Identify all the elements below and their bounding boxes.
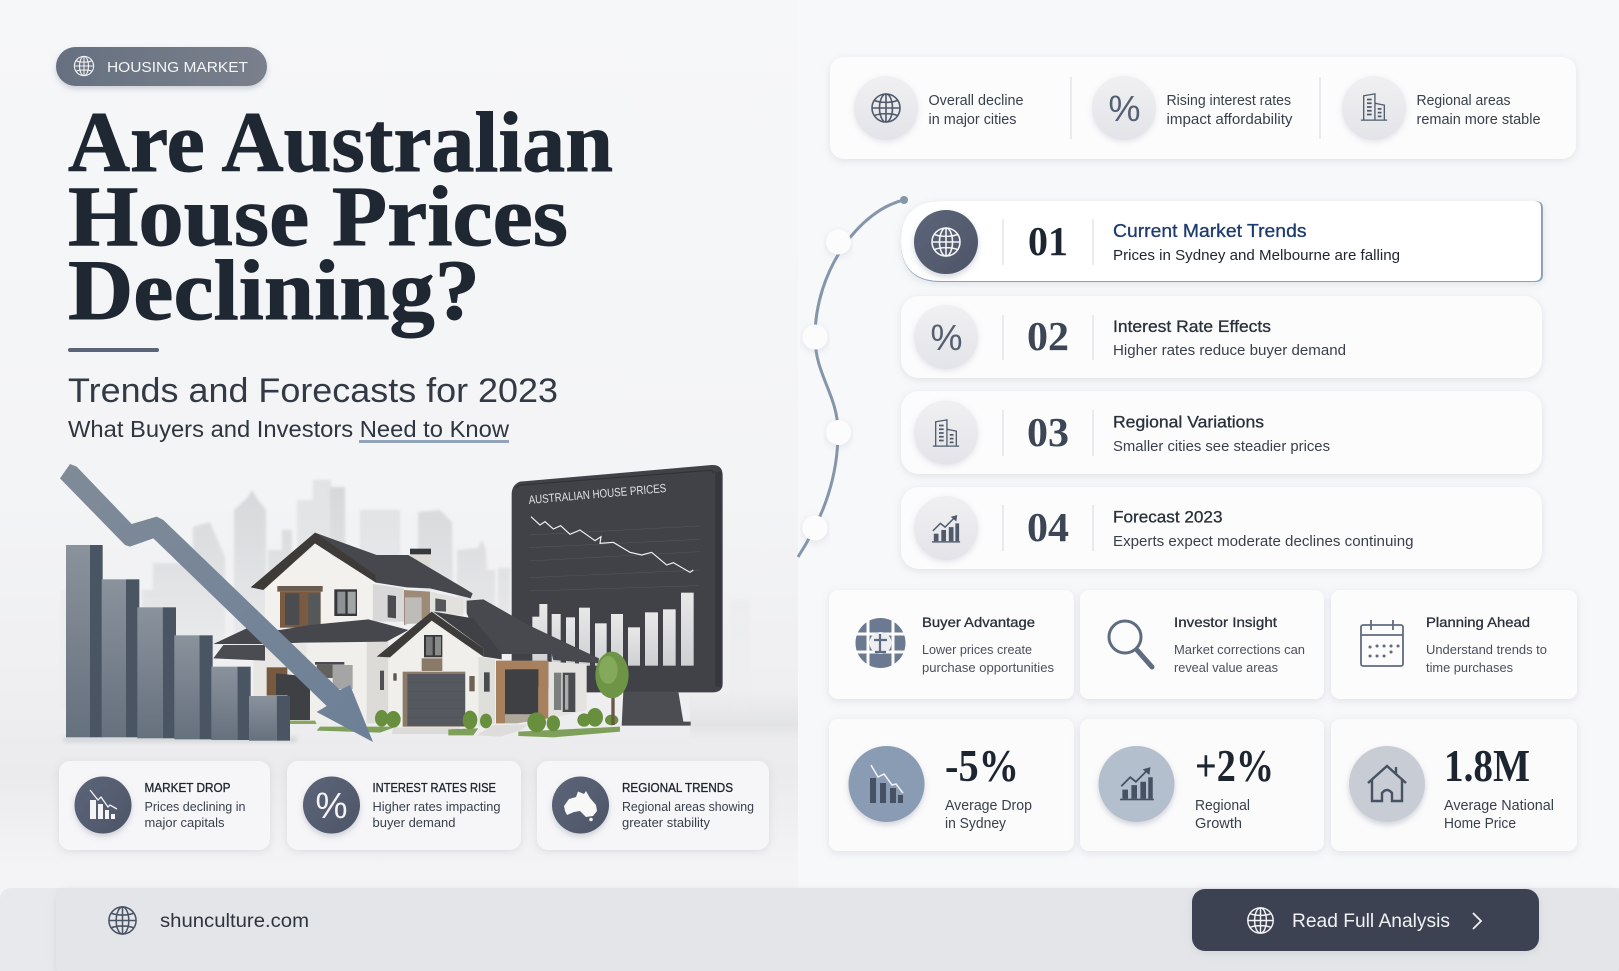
- list item 01: Prices in Sydney and Melbourne are falling: [1113, 247, 1400, 264]
- subtitle: Trends and Forecasts for 2023: [68, 372, 558, 410]
- card: interest rates rise: [287, 761, 521, 850]
- mid roof: [213, 619, 408, 644]
- card: regional trends: REGIONAL TRENDS: [622, 781, 733, 795]
- card: buyer advantage: [829, 590, 1074, 699]
- card: planning ahead: [1331, 590, 1577, 699]
- wall lamps: [393, 673, 397, 681]
- icon: buyer globe: [856, 618, 906, 668]
- stat: regional growth: [1080, 719, 1324, 851]
- card: interest rates rise: Higher rates impacting: [372, 799, 500, 814]
- icon: market drop: [74, 776, 132, 834]
- stat: average drop: in Sydney: [945, 816, 1007, 832]
- board heading: AUSTRALIAN HOUSE PRICES: [528, 481, 667, 507]
- card: buyer advantage: Lower prices create: [922, 643, 1032, 657]
- card: planning ahead: time purchases: [1426, 661, 1513, 675]
- contact shadow: [63, 737, 297, 742]
- list item 01: Current Market Trends: [1113, 221, 1306, 241]
- stat: regional growth: Growth: [1195, 816, 1242, 832]
- list item 04: 04: [1027, 504, 1069, 550]
- card: investor insight: reveal value areas: [1174, 661, 1278, 675]
- footer bar: [0, 888, 1619, 971]
- icon: pill globe: [74, 56, 94, 76]
- summary strip: [830, 57, 1576, 159]
- entry: [496, 661, 548, 723]
- card: interest rates rise: buyer demand: [372, 815, 456, 830]
- ground floor: [307, 643, 367, 722]
- card: investor insight: [1080, 590, 1324, 699]
- paths and lawn: [290, 721, 317, 724]
- upper wall: [265, 545, 373, 623]
- list item 02: Higher rates reduce buyer demand: [1113, 342, 1346, 359]
- stat: regional growth: Regional: [1195, 798, 1250, 814]
- list item 03: Regional Variations: [1113, 412, 1264, 432]
- card: buyer advantage: purchase opportunities: [922, 661, 1054, 675]
- item: overall decline: in major cities: [928, 112, 1016, 128]
- tree: [595, 652, 629, 725]
- board bars: [532, 593, 694, 666]
- icon: percent: [303, 776, 360, 834]
- timeline curve: [798, 196, 908, 557]
- card: planning ahead: Planning Ahead: [1426, 614, 1530, 630]
- front roofs: [467, 599, 599, 663]
- title: Declining?: [68, 242, 480, 338]
- side window: [554, 673, 561, 710]
- button: read full analysis: [1192, 889, 1539, 951]
- item: interest rates: impact affordability: [1166, 112, 1293, 128]
- stat: home price: Home Price: [1444, 816, 1516, 832]
- shrubs: [375, 708, 618, 732]
- card: investor insight: Market corrections can: [1174, 643, 1305, 657]
- item: overall decline: [854, 76, 1024, 140]
- stat: average drop: -5%: [945, 740, 1019, 791]
- title: Are Australian: [68, 94, 613, 190]
- card: planning ahead: Understand trends to: [1426, 643, 1547, 657]
- upper roof: [315, 533, 473, 598]
- icon: drop chart: [848, 746, 924, 822]
- card: market drop: Prices declining in: [144, 799, 246, 814]
- falling bars: [66, 545, 290, 741]
- title: [68, 94, 613, 338]
- list item 04: [901, 487, 1542, 569]
- item: interest rates: Rising interest rates: [1166, 93, 1291, 109]
- illustration: house, falling bars and arrow: [60, 464, 798, 742]
- skyline: [60, 480, 750, 710]
- item: regional stable: Regional areas: [1416, 93, 1510, 109]
- list item 01: 01: [1028, 218, 1068, 264]
- stat: average drop: Average Drop: [945, 798, 1032, 814]
- board stand: [622, 692, 691, 726]
- tagline with underline: What Buyers and Investors Need to Know: [68, 416, 509, 442]
- upper windows: [277, 586, 323, 592]
- card: market drop: major capitals: [144, 815, 225, 830]
- stat: home price: Average National: [1444, 798, 1554, 814]
- card: buyer advantage: Buyer Advantage: [922, 614, 1035, 630]
- haze behind board: [690, 690, 798, 740]
- item: interest rates: [1092, 76, 1293, 140]
- button: read full analysis: Read Full Analysis: [1292, 911, 1450, 932]
- icon: percent: %: [315, 785, 348, 826]
- tag pill: housing market: HOUSING MARKET: [107, 59, 248, 76]
- rear wing: [373, 584, 404, 622]
- list item 02: 02: [1027, 313, 1069, 359]
- list item 03: [901, 391, 1542, 474]
- card: regional trends: Regional areas showing: [622, 799, 754, 814]
- front gable wall: [478, 657, 495, 727]
- card: interest rates rise: INTEREST RATES RISE: [372, 781, 496, 795]
- stat: average drop: [829, 719, 1074, 851]
- item: interest rates: %: [1108, 88, 1141, 129]
- left panel background: [0, 0, 798, 900]
- chimney: [411, 553, 431, 577]
- falling arrow: [60, 464, 373, 742]
- card: market drop: [59, 761, 270, 850]
- list item 03: Smaller cities see steadier prices: [1113, 438, 1330, 455]
- list item 02: Interest Rate Effects: [1113, 317, 1271, 336]
- dividers: [1071, 77, 1320, 139]
- right section wall: [548, 662, 587, 719]
- item: regional stable: remain more stable: [1416, 112, 1540, 128]
- item: regional stable: [1342, 76, 1540, 140]
- card: regional trends: [537, 761, 769, 850]
- stat: home price: 1.8M: [1444, 740, 1530, 791]
- icon: footer globe: [109, 907, 136, 934]
- website: shunculture.com: [160, 911, 309, 932]
- house: [213, 533, 629, 737]
- list item 02: %: [930, 317, 963, 358]
- tag pill: housing market: [56, 47, 267, 86]
- stat: regional growth: +2%: [1195, 740, 1274, 791]
- list item 04: Experts expect moderate declines continuing: [1113, 533, 1414, 550]
- garage door: [403, 672, 465, 727]
- list item 03: 03: [1027, 409, 1069, 455]
- list item 04: Forecast 2023: [1113, 508, 1222, 526]
- card: investor insight: Investor Insight: [1174, 614, 1277, 630]
- stat: home price: [1331, 719, 1577, 851]
- falling bars and arrow: [60, 464, 373, 742]
- icon: australia map: [552, 776, 609, 834]
- card: market drop: MARKET DROP: [144, 781, 230, 795]
- icon: calendar: [1361, 620, 1403, 666]
- gable window and panel: [424, 635, 442, 657]
- card: regional trends: greater stability: [622, 815, 710, 830]
- list item 01: [901, 201, 1543, 282]
- icon: growth chart: [1098, 746, 1174, 822]
- icon: magnifier: [1109, 621, 1152, 667]
- board line chart: [531, 517, 693, 572]
- chart board: [512, 465, 723, 726]
- item: overall decline: Overall decline: [928, 93, 1024, 109]
- icon: house: [1349, 746, 1425, 822]
- list item 02: [901, 296, 1542, 378]
- title: House Prices: [68, 168, 568, 264]
